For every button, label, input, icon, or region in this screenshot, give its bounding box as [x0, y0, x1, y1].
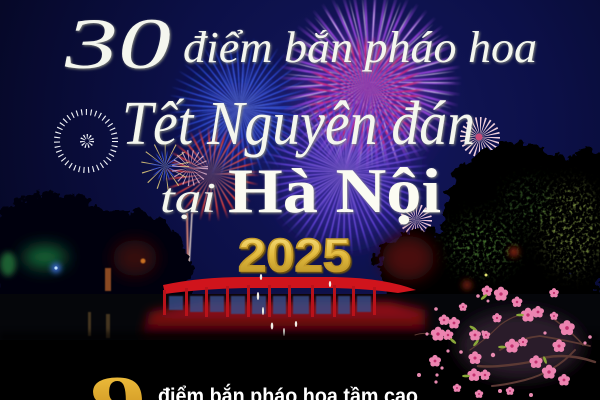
- title line 1: điểm bắn pháo hoa: [183, 23, 537, 72]
- tree silhouette: right: [377, 142, 600, 312]
- title line 3: [160, 155, 441, 226]
- branch stems: [415, 314, 595, 386]
- firework: red burst: [188, 150, 236, 198]
- blossom branch: [415, 286, 595, 398]
- firework: small pink burst: [181, 159, 199, 177]
- firework: small blue and gold burst: [153, 154, 177, 178]
- blossom buds: [417, 294, 592, 397]
- firework: small pink burst lower right: [408, 212, 424, 228]
- black lower band: [0, 340, 600, 400]
- firework: rising trail: [187, 213, 192, 266]
- blossom leaves: [449, 293, 548, 377]
- falling white petals: [257, 274, 331, 336]
- red bridge: [163, 277, 416, 317]
- title line 3: Hà Nội: [228, 155, 441, 226]
- firework: lower violet burst: [303, 130, 387, 214]
- title line 3: tại: [160, 176, 216, 222]
- year 2025 in gold: 2025: [238, 229, 351, 281]
- title line 1: [64, 4, 537, 84]
- firework glow behind bursts: [195, 30, 430, 235]
- firework: white ring: [57, 112, 115, 170]
- title line 2: Tết Nguyên đán: [122, 90, 475, 158]
- title: [64, 4, 537, 226]
- blossoms: [429, 286, 575, 398]
- firework: large blue burst: [204, 72, 276, 144]
- tree silhouette: left: [0, 192, 190, 304]
- lake water: [0, 294, 600, 344]
- firework: pink burst right: [470, 127, 490, 147]
- title line 1: 30: [64, 4, 171, 84]
- firework: large purple burst: [324, 36, 416, 128]
